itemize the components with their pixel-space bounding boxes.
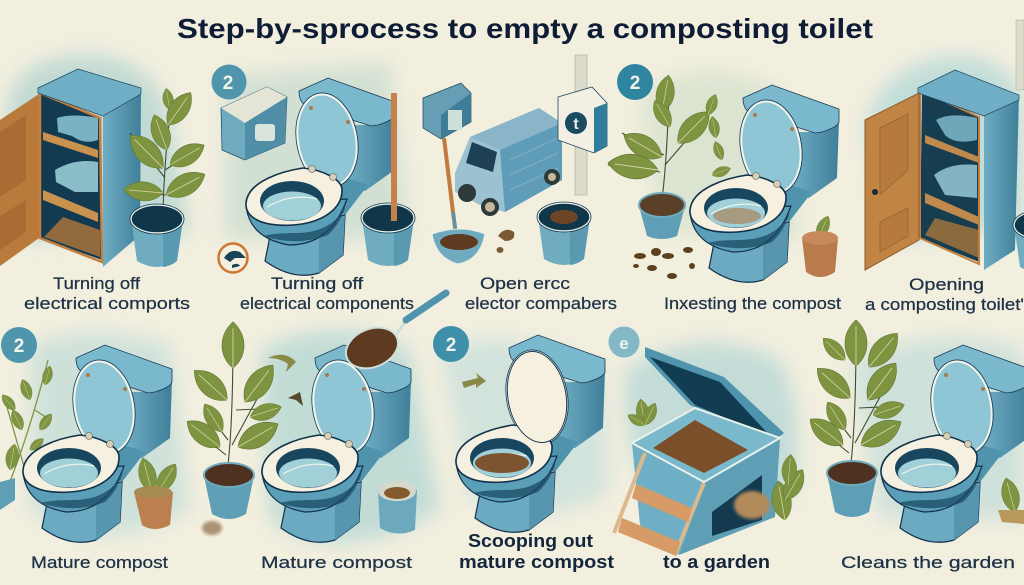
step captions, lower row: to a garden xyxy=(663,552,770,572)
badge: step 2 faded xyxy=(608,326,640,358)
soil smudge xyxy=(202,521,222,535)
caption scooping xyxy=(459,531,614,572)
small arrow mark xyxy=(462,373,486,388)
leaf arrow marks xyxy=(268,355,303,406)
door right xyxy=(865,93,919,270)
cabinet top right xyxy=(918,70,1019,116)
wooden door xyxy=(0,94,39,266)
title: Step-by-sprocess to empty a composting toilet xyxy=(177,13,873,44)
compost scraps xyxy=(633,247,695,279)
sprig at right edge xyxy=(998,476,1024,524)
potted plant, lower right xyxy=(804,320,907,517)
step captions, upper row: Turning off xyxy=(53,274,140,293)
brush and bucket xyxy=(361,93,415,266)
badge: step 2, panel two: 2 xyxy=(223,73,233,94)
vent pipe xyxy=(1016,20,1024,90)
step captions, lower row: Mature compost xyxy=(31,553,168,572)
step captions, upper row: electrical components xyxy=(240,294,414,313)
step captions, upper row: elector compabers xyxy=(465,294,617,313)
compost bucket xyxy=(537,202,591,265)
badge: step 2, lower row three xyxy=(433,326,469,362)
plant and pail, left xyxy=(123,87,210,267)
soil spots xyxy=(498,230,514,241)
small compost pot xyxy=(378,481,417,534)
orange recycle ring xyxy=(218,244,248,272)
box opening xyxy=(632,408,780,482)
toilet lower three xyxy=(456,335,605,532)
truck xyxy=(455,108,562,212)
toilet lower two xyxy=(262,345,411,542)
shovel with soil xyxy=(444,138,453,212)
caption scooping: mature compost xyxy=(459,552,614,572)
cabinet side right xyxy=(984,95,1019,270)
toilet lower four xyxy=(881,345,1024,542)
wispy plant at left edge xyxy=(0,360,55,510)
panel: service box, shovel and truck xyxy=(423,83,562,264)
step captions, lower row xyxy=(31,552,1015,572)
cabinet top xyxy=(38,69,141,116)
bucket at edge xyxy=(1013,210,1024,273)
caption scooping: Scooping out xyxy=(468,531,593,551)
step captions, upper row: electrical comports xyxy=(24,294,190,313)
potted plant, panel four xyxy=(606,74,732,239)
step captions, lower row: Cleans the garden xyxy=(841,553,1015,572)
toilet panel two xyxy=(246,78,395,275)
lid open xyxy=(645,347,784,442)
terracotta pot xyxy=(802,214,838,277)
small terracotta plant xyxy=(134,456,182,529)
pipe and sign xyxy=(558,55,607,195)
ladder xyxy=(614,453,704,555)
panel: opened cabinet, left xyxy=(0,69,141,267)
cream lid xyxy=(500,347,574,447)
toilet lower one xyxy=(23,345,172,542)
step captions, upper row: a composting toilet' xyxy=(865,295,1024,314)
sprig left of box xyxy=(625,398,660,429)
badge: step 2, panel two xyxy=(212,64,246,100)
badge: step 2, panel four: 2 xyxy=(630,73,640,94)
panel: opened cabinet, right xyxy=(865,20,1024,273)
step captions, upper row xyxy=(24,274,1024,314)
toilet panel four xyxy=(690,85,839,282)
step captions, upper row: Inxesting the compost xyxy=(664,294,841,313)
step captions, upper row: Open ercc xyxy=(480,274,571,293)
badge: step 2, panel four xyxy=(617,64,653,100)
cabinet side xyxy=(103,92,141,267)
cabinet interior xyxy=(40,93,102,260)
cabinet interior right xyxy=(920,93,979,262)
badge: step 2, lower row one xyxy=(1,327,37,363)
sprig right of box xyxy=(769,454,810,522)
step captions, upper row: Opening xyxy=(909,275,984,294)
wall box icon xyxy=(221,87,287,160)
potted plant, lower centre xyxy=(181,322,284,519)
pipe and sign: t xyxy=(573,116,579,133)
compost box with ladder xyxy=(614,347,784,556)
step captions, upper row: Turning off xyxy=(271,274,363,293)
box body xyxy=(632,443,704,555)
compost in bowl xyxy=(475,453,529,473)
scoop with compost xyxy=(340,293,446,376)
badge: step 2 faded: e xyxy=(619,334,629,353)
badge: step 2, lower row one: 2 xyxy=(14,336,24,357)
service box on post xyxy=(423,83,471,139)
badge: step 2, lower row three: 2 xyxy=(446,335,456,356)
step captions, lower row: Mature compost xyxy=(261,553,412,572)
brown water xyxy=(713,208,761,224)
